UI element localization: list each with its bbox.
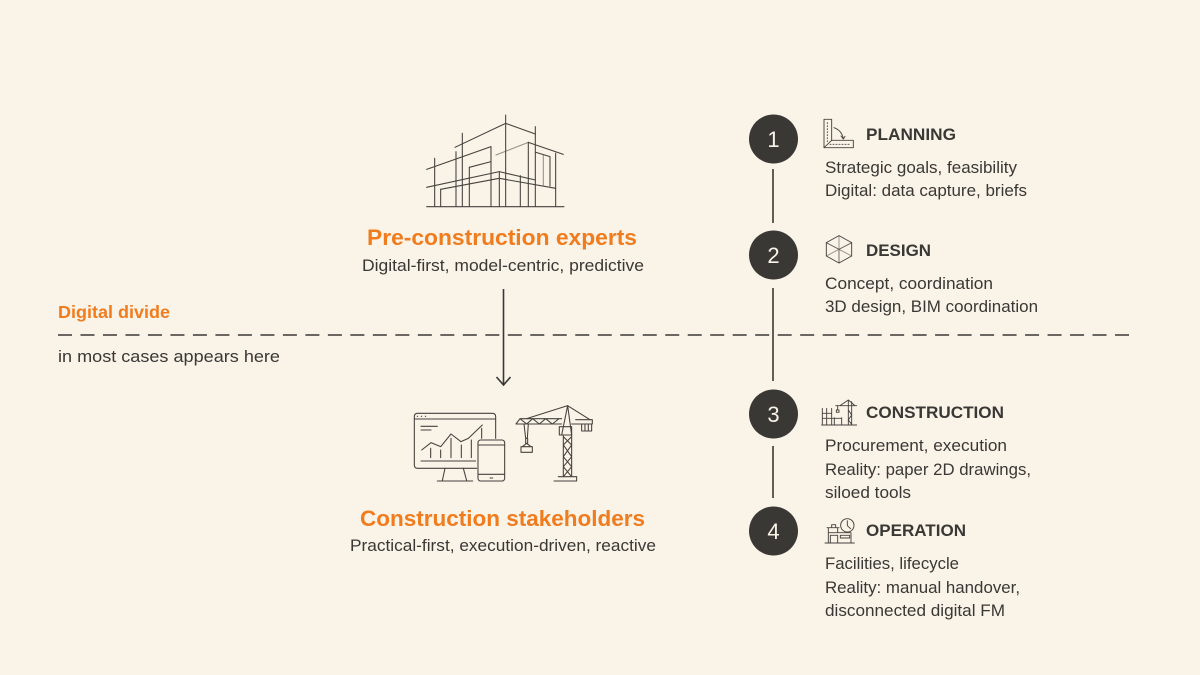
number 4: 4 — [767, 519, 780, 544]
step 2: design — [749, 230, 1038, 316]
details — [825, 274, 1038, 316]
details: Reality: paper 2D drawings, — [825, 460, 1031, 479]
details: siloed tools — [825, 483, 911, 502]
text: construction description: Practical-first, execution-driven, reactive — [350, 536, 656, 555]
details — [825, 158, 1027, 200]
details: Strategic goals, feasibility — [825, 158, 1017, 177]
text: pre-construction description: Digital-first, model-centric, predictive — [362, 256, 644, 275]
tablet — [478, 440, 505, 481]
monitor with chart — [414, 413, 496, 481]
timeline connectors — [772, 169, 774, 498]
number 2: 2 — [767, 243, 780, 268]
arrow: down across the divide — [496, 289, 510, 385]
icon: set square — [824, 119, 853, 148]
heading: OPERATION — [866, 522, 966, 540]
number 3: 3 — [767, 402, 780, 427]
details: Facilities, lifecycle — [825, 554, 959, 573]
icon: monitor, tablet and crane — [414, 406, 592, 481]
details: Procurement, execution — [825, 436, 1007, 455]
heading: DESIGN — [866, 242, 931, 260]
details: Reality: manual handover, — [825, 578, 1020, 597]
number 1 — [749, 114, 798, 164]
step 1: planning — [749, 114, 1027, 200]
digital divide dashed line — [58, 334, 1129, 336]
details: Digital: data capture, briefs — [825, 181, 1027, 200]
step 3: construction — [749, 390, 1031, 502]
number 3 — [749, 390, 798, 438]
details: Concept, coordination — [825, 274, 993, 293]
label: digital divide: Digital divide — [58, 302, 170, 322]
heading: CONSTRUCTION — [866, 404, 1004, 422]
tower crane — [516, 406, 592, 481]
number 2 — [749, 230, 798, 280]
heading: construction stakeholders: Construction stakeholders — [360, 506, 645, 531]
details: disconnected digital FM — [825, 601, 1005, 620]
number 4 — [749, 506, 798, 556]
icon: site with crane — [822, 400, 857, 425]
number 1: 1 — [767, 127, 780, 152]
icon: facility with clock — [825, 519, 854, 543]
details — [825, 554, 1020, 620]
heading: PLANNING — [866, 126, 956, 144]
icon: cube — [826, 236, 852, 263]
details — [825, 436, 1031, 502]
icon: building wireframe — [427, 115, 564, 207]
step 4: operation — [749, 506, 1020, 620]
details: 3D design, BIM coordination — [825, 297, 1038, 316]
heading: pre-construction experts: Pre-construction experts — [367, 225, 637, 250]
label: in most cases appears here: in most cases appears here — [58, 347, 280, 366]
